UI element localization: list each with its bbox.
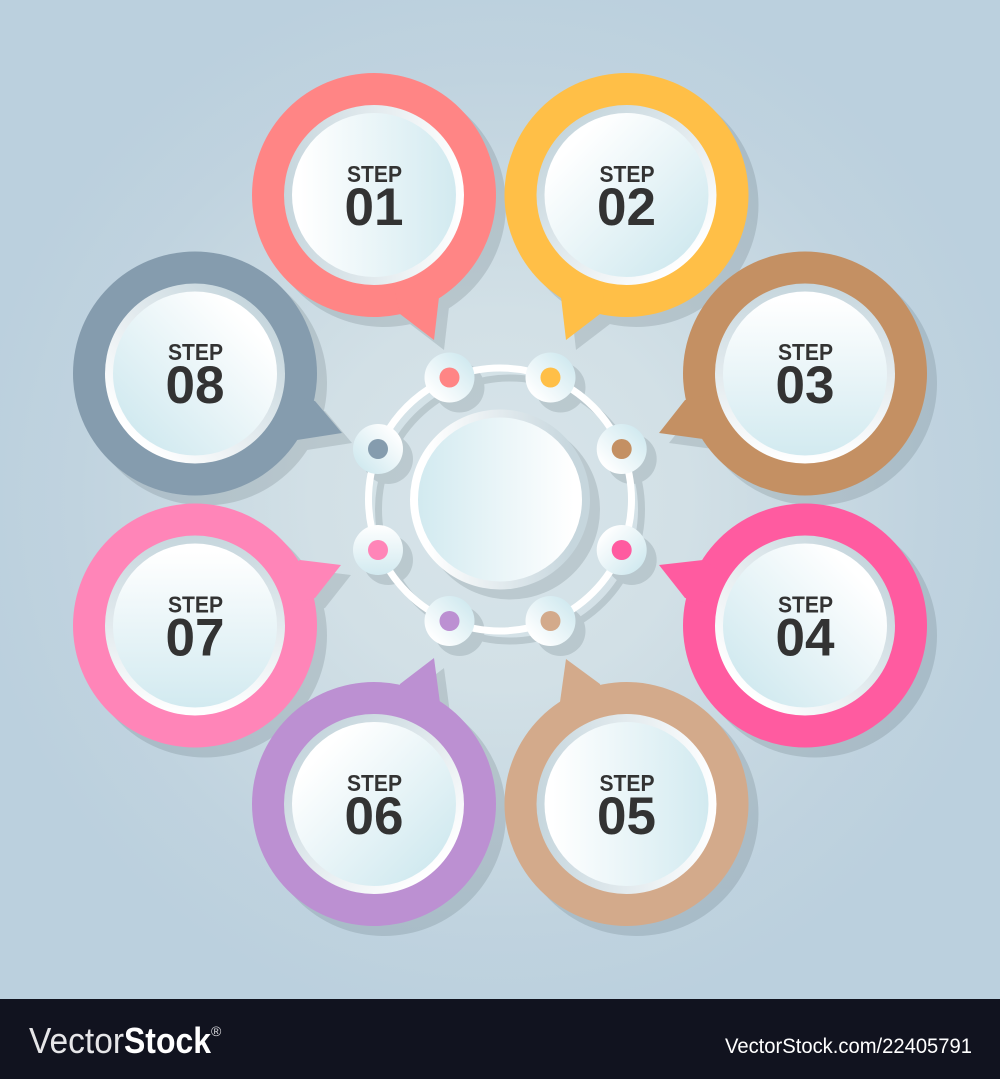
panel: step 06 xyxy=(252,658,496,926)
panel: step 01: 01 xyxy=(344,178,404,237)
panel: step 05 xyxy=(504,659,748,926)
footer logo xyxy=(29,1020,222,1061)
panel: step 02 xyxy=(504,73,748,340)
panel: step 07 xyxy=(73,504,341,748)
node: step 05 marker xyxy=(526,596,576,646)
footer logo: Stock xyxy=(124,1020,212,1061)
panel: step 07: STEP xyxy=(168,592,223,618)
node: step 02 marker xyxy=(526,352,576,402)
panel: step 04: STEP xyxy=(778,592,833,618)
panel: step 06: 06 xyxy=(344,787,404,846)
centre disc xyxy=(410,410,590,590)
panel: step 04 xyxy=(659,504,927,748)
node: step 03 marker xyxy=(597,424,647,474)
node: step 01 marker xyxy=(424,352,474,402)
footer bar xyxy=(0,999,1000,1079)
panel: step 05: STEP xyxy=(600,770,654,796)
panel: step 08: STEP xyxy=(168,339,223,365)
panel: step 03: 03 xyxy=(776,356,834,415)
panel: step 08 xyxy=(73,252,342,496)
connecting white ring xyxy=(368,368,632,631)
panel: step 01: STEP xyxy=(347,161,402,187)
node: step 07 marker xyxy=(353,525,403,575)
panel: step 08: 08 xyxy=(166,356,224,415)
panel: step 03 xyxy=(659,252,927,496)
node: step 06 marker xyxy=(424,596,474,646)
panel: step 07: 07 xyxy=(166,608,224,668)
drop shadows xyxy=(83,83,937,936)
footer logo: ® xyxy=(211,1023,222,1039)
node: step 04 marker xyxy=(597,525,647,575)
panel: step 05: 05 xyxy=(597,787,656,846)
panel: step 01 xyxy=(252,73,496,340)
panel: step 06: STEP xyxy=(347,770,402,796)
panel: step 03: STEP xyxy=(778,339,833,365)
panel: step 04: 04 xyxy=(776,608,835,668)
node: step 08 marker xyxy=(353,424,403,474)
panel: step 02: STEP xyxy=(600,161,654,187)
footer logo: Vector xyxy=(29,1020,124,1061)
panel: step 02: 02 xyxy=(597,178,656,237)
footer image id: VectorStock.com/22405791 xyxy=(725,1035,972,1058)
